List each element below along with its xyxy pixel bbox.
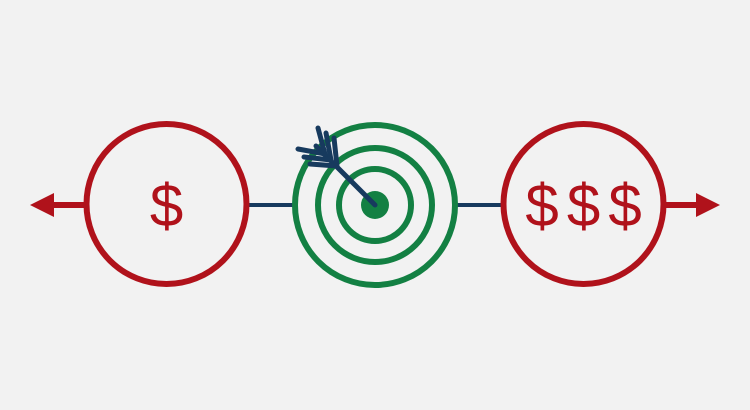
right circle: high cost bbox=[504, 124, 664, 284]
left arrow bbox=[30, 193, 86, 217]
dart arrow bbox=[298, 128, 375, 205]
right circle: high cost: $ bbox=[608, 172, 642, 239]
right circle: high cost: $ bbox=[525, 172, 559, 239]
left circle: low cost: $ bbox=[150, 172, 183, 239]
target bbox=[295, 125, 455, 285]
connector lines bbox=[249, 203, 501, 207]
right arrow bbox=[664, 193, 720, 217]
left circle: low cost bbox=[86, 124, 246, 284]
right circle: high cost: $ bbox=[567, 172, 600, 239]
